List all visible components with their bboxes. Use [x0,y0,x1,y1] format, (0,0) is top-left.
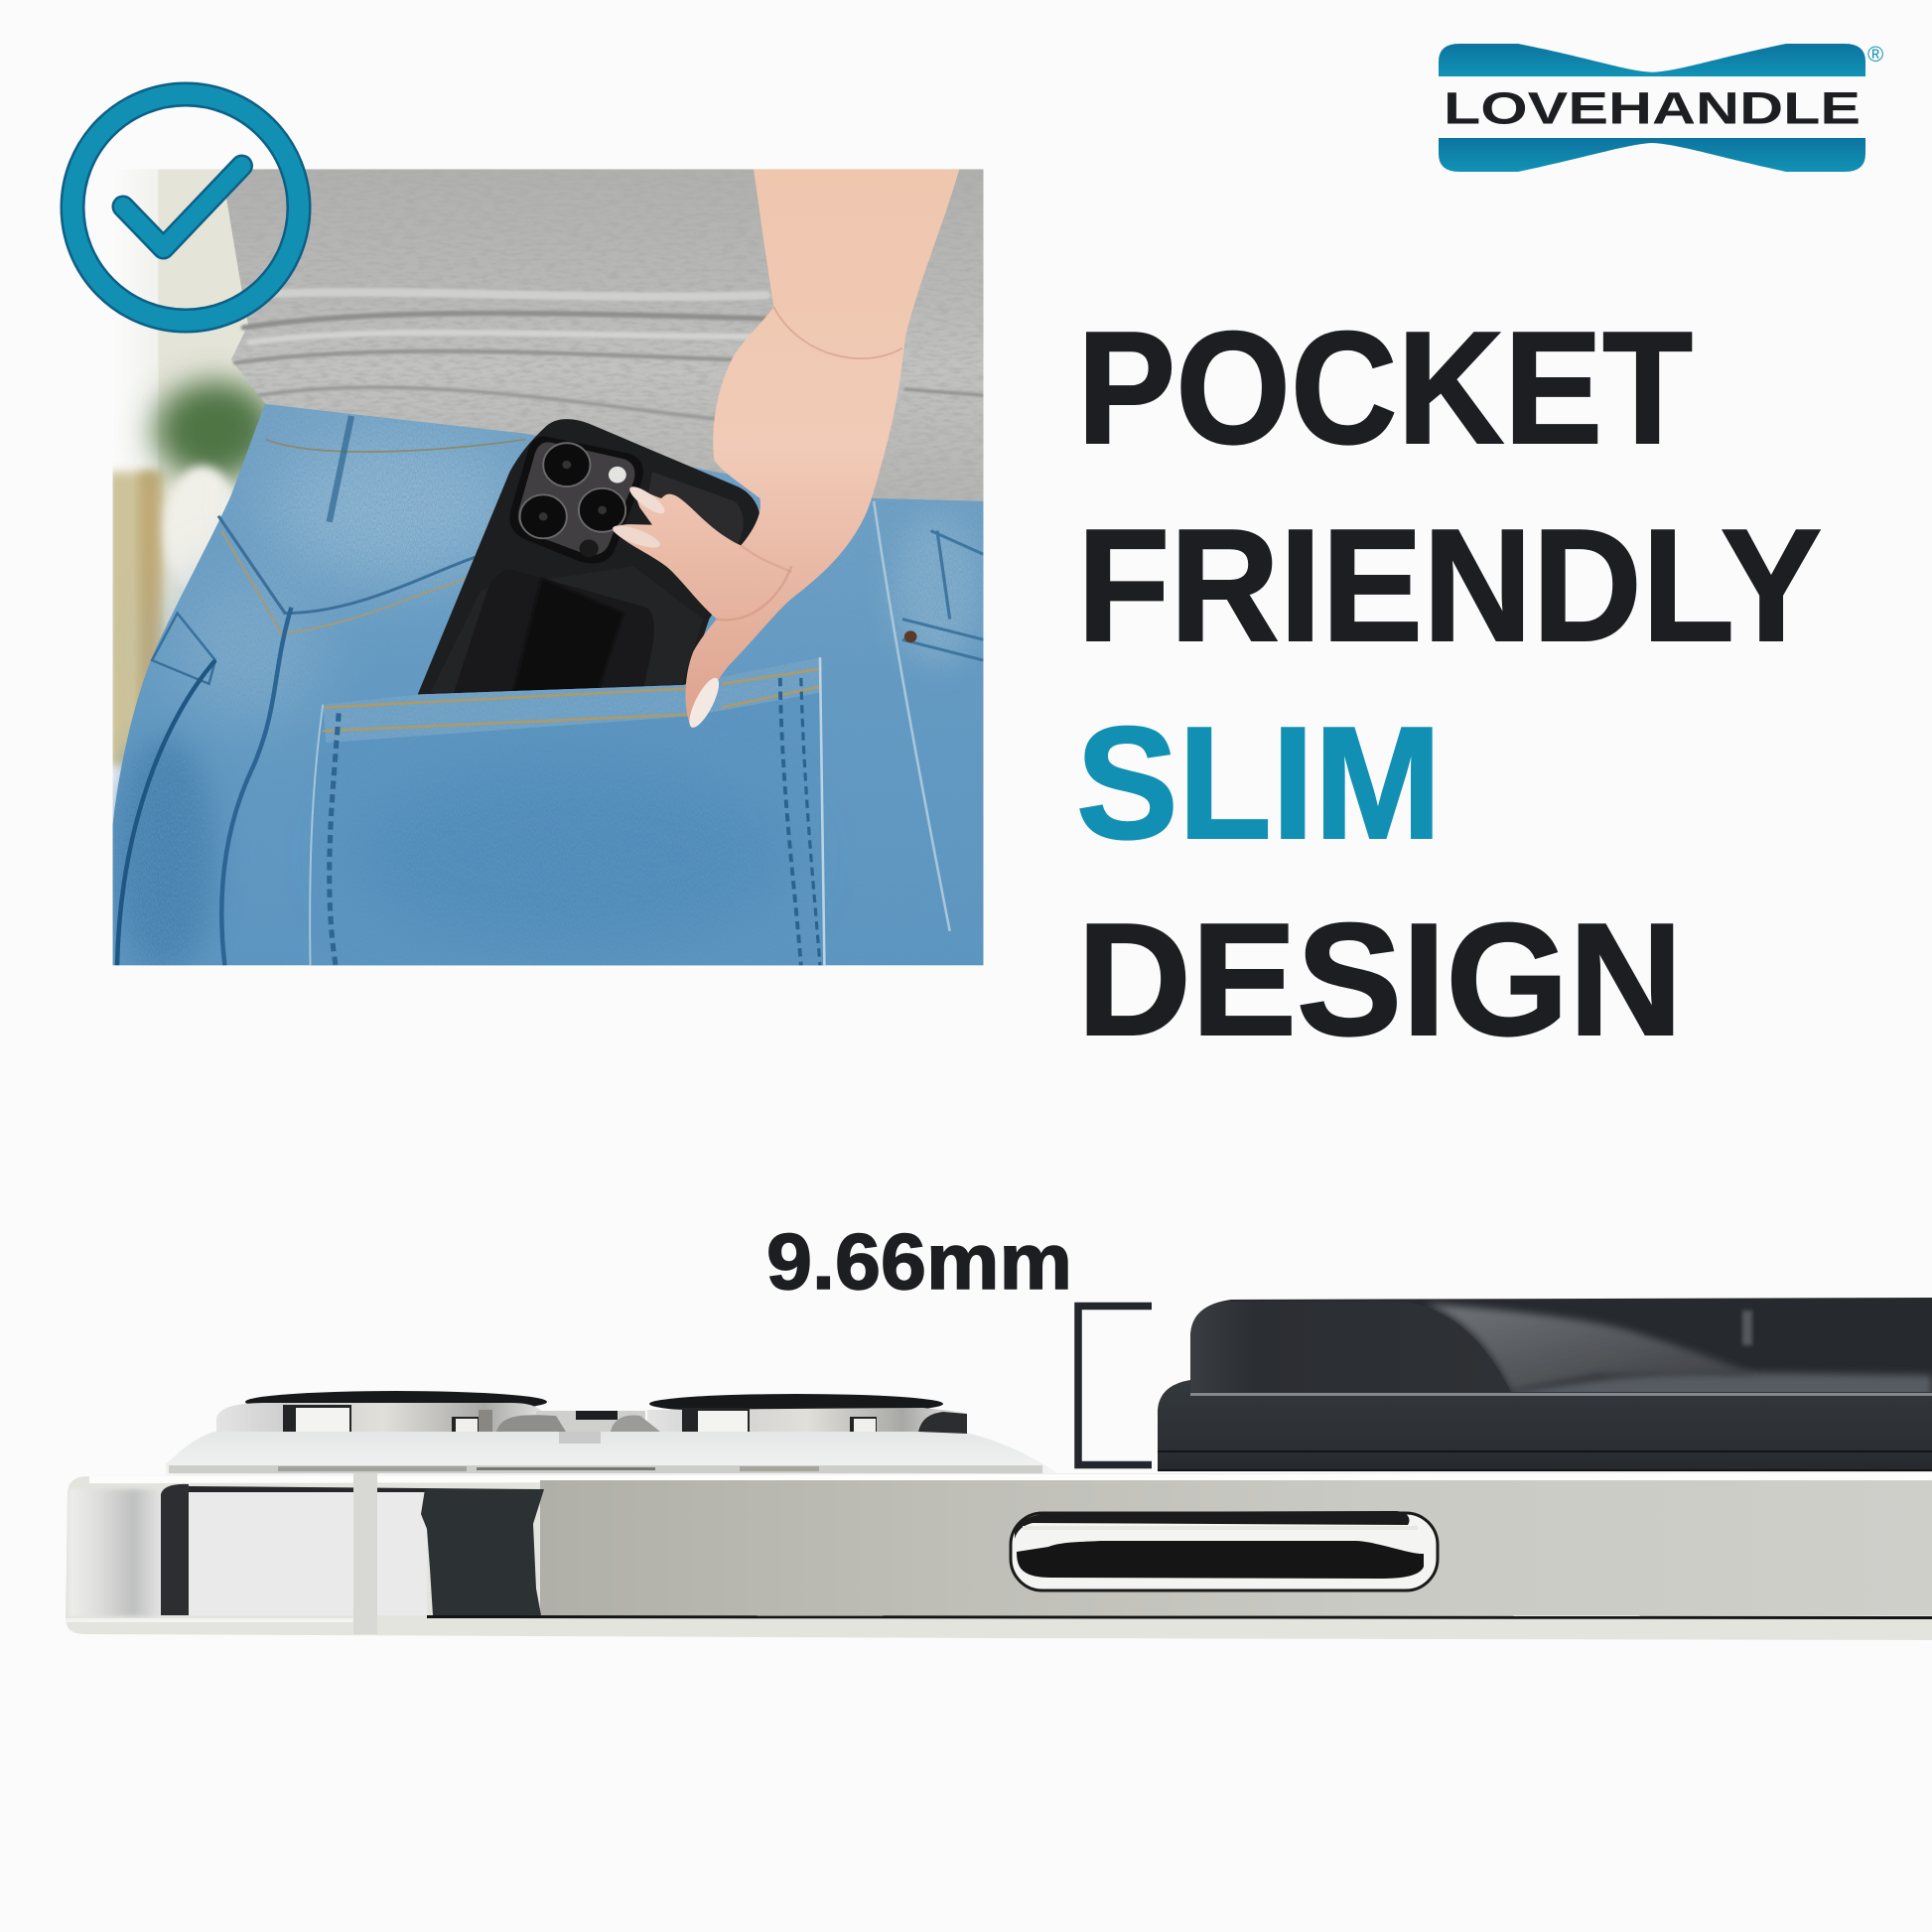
waistband and yoke seams [117,416,984,965]
measurement label: 9.66mm [766,1217,1072,1306]
flash [609,467,626,483]
lens: left [216,1391,552,1432]
heading line: POCKET: POCKET [1077,299,1693,478]
heading line: DESIGN: DESIGN [1077,891,1683,1069]
side band [540,1480,1932,1615]
lens [579,488,625,532]
denim weave on jeans [113,401,984,965]
shirt [215,169,984,504]
lens [543,443,590,486]
icon: check mark badge [72,94,299,321]
lens: right [647,1394,967,1434]
lower edge shade [66,1618,353,1622]
shirt folds [235,292,984,419]
tab on grip [1742,1311,1752,1345]
folded grip on case [453,570,654,696]
photo: phone in jeans back pocket [107,169,984,972]
grip lump [1190,1302,1511,1392]
folded phone grip side view [1158,1298,1932,1471]
phone side view [66,1391,1932,1640]
reflection: white panel [189,1489,427,1615]
photo background blur [113,169,265,772]
pocket stitching [310,657,824,965]
logo: Lovehandle: LOVEHANDLE [1444,82,1861,133]
side button [1011,1511,1438,1590]
rivet [904,630,917,642]
grip seam [1190,1393,1932,1396]
antenna strip [353,1473,377,1634]
jeans [113,401,984,972]
phone in case [415,419,760,702]
case back highlight [646,472,744,545]
heading line: FRIENDLY: FRIENDLY [1077,496,1822,675]
grip upper [1190,1298,1932,1392]
logo: Lovehandle [1439,42,1883,172]
logo: Lovehandle: ® [1867,42,1883,67]
top highlight [89,1472,1932,1483]
phone body [66,1471,1932,1640]
grip lower highlight [1511,1368,1932,1392]
grip base [1158,1380,1932,1471]
heading line: SLIM: SLIM [1076,694,1442,873]
reflection: left edge [69,1489,161,1616]
grip slope highlight [1425,1304,1757,1392]
heading: Pocket Friendly Slim Design [1076,299,1822,1069]
reflection: dark stripe [161,1484,189,1615]
flash and sensor between lenses [496,1411,660,1444]
measurement bracket [1078,1307,1152,1465]
camera plate [166,1430,1060,1475]
hand and forearm [610,169,959,731]
camera island [509,436,643,564]
lens [520,494,567,538]
denim weave on pocket [324,658,819,935]
back pocket [304,654,830,967]
reflection: dark block [421,1489,544,1615]
black seam line [427,1615,1932,1619]
nails [629,486,665,513]
